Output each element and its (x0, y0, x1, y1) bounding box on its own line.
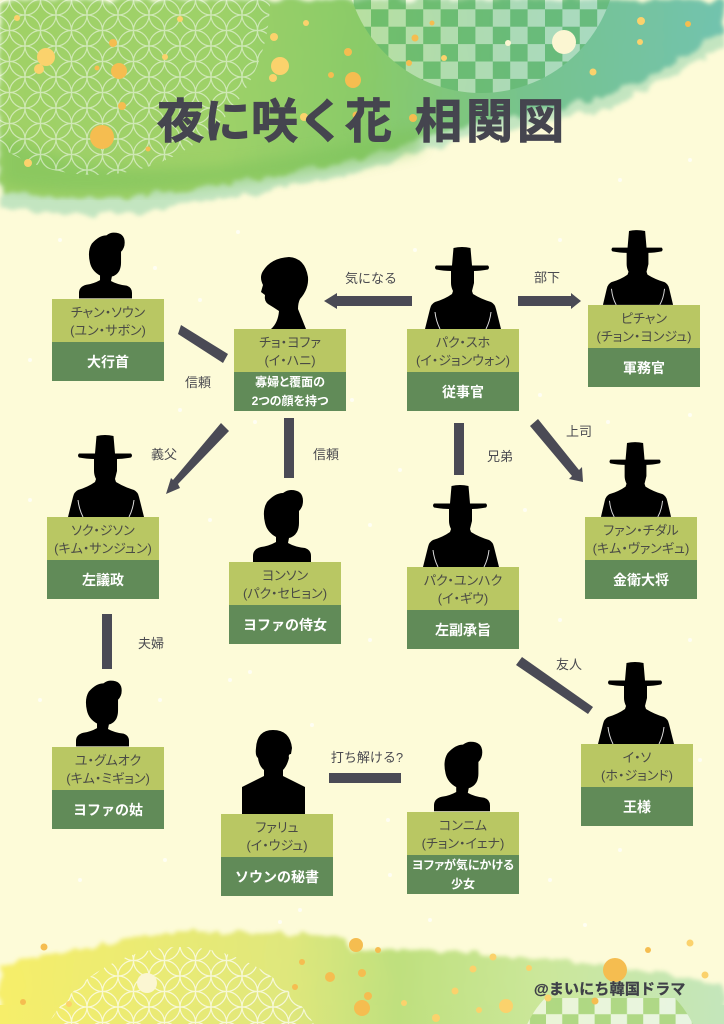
person: パク・スホ (407, 247, 519, 411)
card (221, 814, 333, 896)
line: 信頼 left (178, 325, 228, 363)
card: 2つの顔を持つ (252, 394, 328, 408)
label: 部下: 部下 (534, 270, 560, 285)
person: コンニム (407, 742, 519, 894)
arrow: 義父 (166, 423, 229, 494)
icon: woman silhouette (79, 232, 132, 298)
person: ファリュ (221, 730, 333, 896)
line: 夫婦 (102, 614, 112, 669)
card (229, 562, 341, 644)
icon: man with hat silhouette (425, 247, 501, 329)
card (52, 747, 164, 829)
label: 信頼: 信頼 (313, 447, 339, 462)
icon: man with hat silhouette (68, 435, 144, 517)
card (407, 329, 519, 411)
person: ピチャン (588, 230, 700, 387)
card: (イ・ウジュ) (246, 838, 308, 853)
label: 義父: 義父 (151, 447, 177, 462)
card: (チョン・イェナ) (422, 836, 504, 851)
card: 王様 (623, 798, 651, 814)
icon: woman silhouette (76, 680, 129, 746)
card: (イ・ハニ) (264, 353, 316, 368)
card: ソウンの秘書 (235, 868, 319, 884)
card: ヨファが気にかける (412, 858, 514, 872)
credit: @まいにち韓国ドラマ (534, 981, 686, 998)
card (407, 567, 519, 649)
card: ピチャン (621, 311, 667, 326)
icon: man with hat silhouette (601, 442, 671, 517)
icon: woman profile silhouette (261, 257, 308, 329)
label: 上司: 上司 (566, 424, 592, 439)
card (234, 329, 346, 411)
card (588, 305, 700, 387)
person: ユ・グムオク (52, 680, 164, 829)
line: 兄弟 (454, 423, 464, 475)
arrow: 部下 (518, 293, 581, 309)
arrow: 上司 (530, 419, 583, 482)
label: 友人: 友人 (556, 657, 582, 672)
icon: man with hat silhouette (598, 662, 674, 744)
icon: woman silhouette (434, 742, 490, 812)
card: (パク・セヒョン) (243, 586, 327, 601)
card: ヨファの姑 (73, 802, 143, 818)
person: チャン・ソウン (52, 232, 164, 381)
card (47, 517, 159, 599)
card: (ユン・サボン) (70, 323, 146, 338)
card: コンニム (439, 818, 487, 833)
line: 信頼 vertical (284, 418, 294, 478)
card: 寡婦と覆面の (255, 374, 325, 388)
card (585, 517, 697, 599)
label: 兄弟: 兄弟 (487, 449, 513, 464)
line: 打ち解ける (329, 773, 401, 783)
card: イ・ソ (623, 750, 651, 765)
icon: man with hat silhouette (603, 230, 673, 305)
card (581, 744, 693, 826)
card: ヨンソン (262, 568, 308, 583)
card (52, 299, 164, 381)
card: (キム・ヴァンギュ) (593, 541, 689, 556)
card: (イ・ギウ) (438, 591, 488, 606)
card: 少女 (451, 876, 475, 890)
label: 気になる: 気になる (345, 271, 397, 286)
card: ファン・チダル (603, 523, 679, 538)
card: ファリュ (255, 820, 299, 835)
card: 左議政 (82, 572, 124, 588)
card: 金衛大将 (613, 572, 669, 588)
title (157, 95, 568, 148)
card: ソク・ジソン (71, 523, 135, 538)
arrow: 気になる (324, 293, 412, 309)
person: チョ・ヨファ (234, 257, 346, 411)
card: パク・スホ (436, 335, 490, 350)
card: (イ・ジョンウォン) (416, 353, 510, 368)
label: 夫婦: 夫婦 (138, 636, 164, 651)
card: (チョン・ヨンジュ) (596, 329, 691, 344)
person: ヨンソン (229, 490, 341, 644)
card: (ホ・ジョンド) (601, 768, 673, 783)
card: 軍務官 (623, 360, 665, 376)
card: チョ・ヨファ (259, 335, 321, 350)
card: 大行首 (87, 354, 129, 370)
card: ユ・グムオク (75, 753, 141, 768)
person: パク・ユンハク (407, 485, 519, 649)
icon: man short hair silhouette (242, 730, 305, 814)
card: (キム・サンジュン) (54, 541, 152, 556)
person: ソク・ジソン (47, 435, 159, 599)
card: (キム・ミギョン) (66, 771, 150, 786)
card: ヨファの侍女 (243, 616, 327, 632)
line: 友人 (516, 657, 593, 714)
person: イ・ソ (581, 662, 693, 826)
icon: man with hat silhouette (423, 485, 499, 567)
title: 夜に咲く花 (157, 95, 392, 148)
card (407, 812, 519, 894)
card: パク・ユンハク (424, 573, 502, 588)
title: 相関図 (415, 95, 568, 148)
person: ファン・チダル (585, 442, 697, 599)
card: チャン・ソウン (71, 305, 145, 320)
label: 信頼: 信頼 (185, 375, 211, 390)
label: 打ち解ける?: 打ち解ける? (331, 750, 403, 765)
icon: woman silhouette (253, 490, 311, 562)
card: 左副承旨 (435, 622, 491, 638)
card: 従事官 (442, 384, 484, 400)
